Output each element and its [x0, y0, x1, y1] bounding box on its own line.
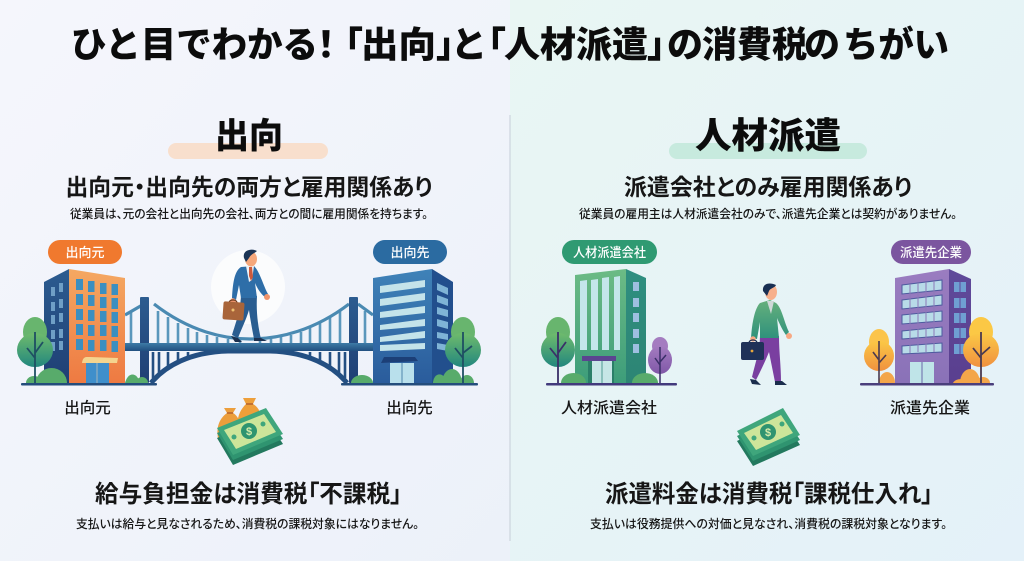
- title: と: [451, 24, 487, 65]
- tree: left of 出向元: [17, 317, 53, 383]
- icon: staff worker with briefcase: [741, 283, 792, 385]
- background: right half: [510, 0, 1024, 561]
- label: 出向元 pill: 出向元: [65, 245, 105, 260]
- label: 出向先 pill: [373, 240, 447, 264]
- title: [71, 24, 949, 65]
- caption: 出向元: 出向元: [64, 399, 111, 417]
- heading: 人材派遣: 人材派遣: [695, 115, 841, 156]
- ground line: 人材派遣会社: [546, 383, 677, 386]
- label: 派遣先企業 pill: [891, 240, 971, 264]
- caption: 人材派遣会社: 人材派遣会社: [561, 399, 658, 417]
- title: ちがい: [843, 24, 949, 65]
- caption: 出向先: 出向先: [386, 399, 433, 417]
- shrubs: 人材派遣会社: [561, 373, 658, 383]
- tree: orange left: [864, 329, 894, 383]
- tree: green: [541, 317, 575, 383]
- panel: 人材派遣: [541, 115, 999, 531]
- title: 「: [470, 24, 506, 65]
- subheading: 雇用関係: 派遣会社とのみ雇用関係あり: [624, 174, 912, 200]
- icon: businessman with briefcase: [222, 250, 270, 342]
- icon: money bags and banknotes: [217, 398, 283, 465]
- title: ひと目でわかる: [71, 24, 318, 65]
- label: 人材派遣会社 pill: 人材派遣会社: [573, 245, 646, 260]
- tree: orange right: [963, 317, 999, 383]
- heading highlight: 人材派遣: [669, 143, 867, 159]
- caption: 派遣先企業: 派遣先企業: [890, 399, 971, 417]
- label: 人材派遣会社 pill: [562, 240, 657, 264]
- title: ！: [308, 24, 344, 65]
- title: 」: [436, 24, 472, 65]
- icon: money bags and banknotes: $: [246, 426, 252, 438]
- icon: banknotes: [737, 408, 800, 466]
- conclusion: 不課税: 給与負担金は消費税「不課税」: [95, 481, 402, 508]
- background: left half: [0, 0, 510, 561]
- title: 出向: [361, 24, 436, 65]
- conclusion: 課税仕入れ: 派遣料金は消費税「課税仕入れ」: [605, 481, 933, 508]
- icon: banknotes: $: [765, 427, 771, 439]
- label: 派遣先企業 pill: 派遣先企業: [900, 245, 962, 260]
- label: 出向先 pill: 出向先: [390, 245, 430, 260]
- description: 不課税: 支払いは給与と見なされるため、消費税の課税対象にはなりません。: [76, 516, 419, 531]
- person backdrop circle: [211, 250, 285, 324]
- ground line: 出向先: [341, 383, 478, 386]
- title: の: [804, 24, 840, 65]
- heading highlight: 出向: [168, 143, 328, 159]
- ground line: 派遣先企業: [860, 383, 994, 386]
- tree: purple: [648, 337, 672, 383]
- label: 出向元 pill: [48, 240, 122, 264]
- description: 課税仕入れ: 支払いは役務提供への対価と見なされ、消費税の課税対象となります。: [590, 516, 947, 531]
- description: 雇用関係: 従業員の雇用主は人材派遣会社のみで、派遣先企業とは契約がありません。: [579, 206, 957, 221]
- bridge: [125, 297, 373, 383]
- building: 出向元: [44, 269, 125, 383]
- shrubs: 出向先: [351, 369, 474, 383]
- ground line: 出向元: [21, 383, 157, 386]
- title: の: [667, 24, 703, 65]
- title: 」: [647, 24, 683, 65]
- building: 派遣先企業: [895, 269, 971, 383]
- shrubs: 出向元: [26, 368, 148, 383]
- subheading: 雇用関係: 出向元・出向先の両方と雇用関係あり: [66, 174, 432, 200]
- title: 消費税: [702, 24, 807, 65]
- title: 「: [327, 24, 363, 65]
- description: 雇用関係: 従業員は、元の会社と出向先の会社、両方との間に雇用関係を持ちます。: [70, 206, 428, 221]
- tree: right of 出向先: [445, 317, 481, 383]
- heading: 出向: 出向: [215, 117, 283, 156]
- building: 人材派遣会社: [575, 269, 646, 383]
- title: 人材派遣: [504, 24, 648, 65]
- shrubs: 派遣先企業: [879, 369, 990, 383]
- panel: 出向: [17, 117, 481, 531]
- building: 出向先: [373, 269, 453, 383]
